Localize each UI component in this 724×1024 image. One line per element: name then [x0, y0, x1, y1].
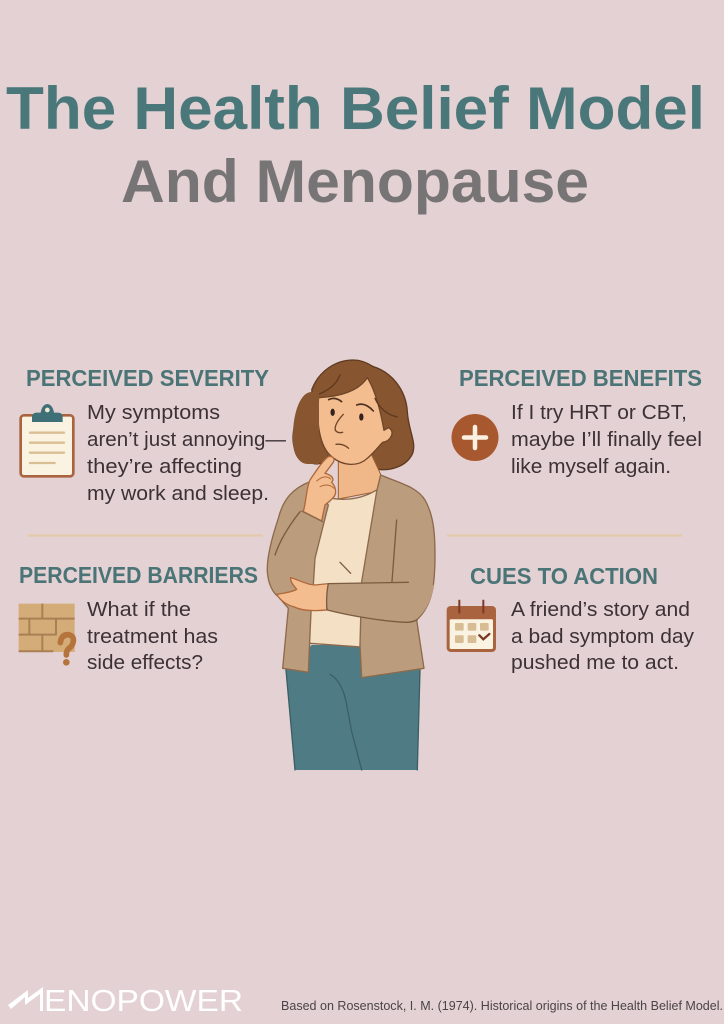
- text: benefits quote: like myself again.: [511, 456, 671, 478]
- text: severity quote: My symptoms: [87, 402, 220, 424]
- neck: [338, 455, 381, 499]
- shirt: [310, 490, 377, 647]
- title: [6, 75, 705, 215]
- hair: left side overlay: [293, 392, 319, 464]
- illustration: hair left lobe: [293, 384, 328, 464]
- text: severity quote: aren’t just annoying—: [87, 429, 286, 451]
- heading: perceived severity: PERCEIVED SEVERITY: [26, 365, 269, 391]
- panel: perceived barriers: [19, 562, 258, 674]
- title: The Health Belief Model: [6, 75, 705, 142]
- icon: calendar: [447, 601, 496, 652]
- hand at chin: [303, 456, 336, 521]
- citation: Based on Rosenstock, I. M. (1974). Historical origins of the Health Belief Model.: [281, 999, 723, 1013]
- logo: Menopower: ENOPOWER: [44, 983, 243, 1018]
- heading: cues to action: CUES TO ACTION: [470, 563, 658, 589]
- title: And Menopause: [121, 148, 589, 215]
- panel: cues to action: [447, 563, 694, 674]
- icon: brick wall with question mark: [19, 604, 75, 666]
- text: benefits quote: maybe I’ll finally feel: [511, 429, 702, 451]
- text: cues quote: a bad symptom day: [511, 626, 694, 648]
- icon: plus circle: [452, 414, 498, 461]
- text: barriers quote: What if the: [87, 599, 191, 621]
- text: cues quote: pushed me to act.: [511, 652, 679, 674]
- panel: perceived benefits: [452, 365, 702, 478]
- forearm sleeve: [327, 582, 434, 622]
- illustration: thinking woman: [267, 360, 435, 770]
- text: barriers quote: side effects?: [87, 652, 203, 674]
- text: benefits quote: If I try HRT or CBT,: [511, 402, 687, 424]
- text: severity quote: they’re affecting: [87, 456, 242, 478]
- text: benefits quote: [511, 402, 702, 478]
- text: cues quote: A friend’s story and: [511, 599, 690, 621]
- heading: perceived barriers: PERCEIVED BARRIERS: [19, 562, 258, 588]
- cardigan right front: [360, 475, 435, 678]
- panel: perceived severity: [21, 365, 286, 505]
- hand on elbow: [277, 578, 328, 611]
- heading: perceived benefits: PERCEIVED BENEFITS: [459, 365, 702, 391]
- hair back: [312, 360, 414, 470]
- face: [318, 378, 392, 464]
- text: barriers quote: [87, 599, 218, 674]
- text: severity quote: [87, 402, 286, 505]
- icon: clipboard: [21, 404, 73, 476]
- text: cues quote: [511, 599, 694, 674]
- trousers: [286, 645, 420, 770]
- cardigan left side: [267, 482, 328, 672]
- text: severity quote: my work and sleep.: [87, 483, 269, 505]
- text: barriers quote: treatment has: [87, 626, 218, 648]
